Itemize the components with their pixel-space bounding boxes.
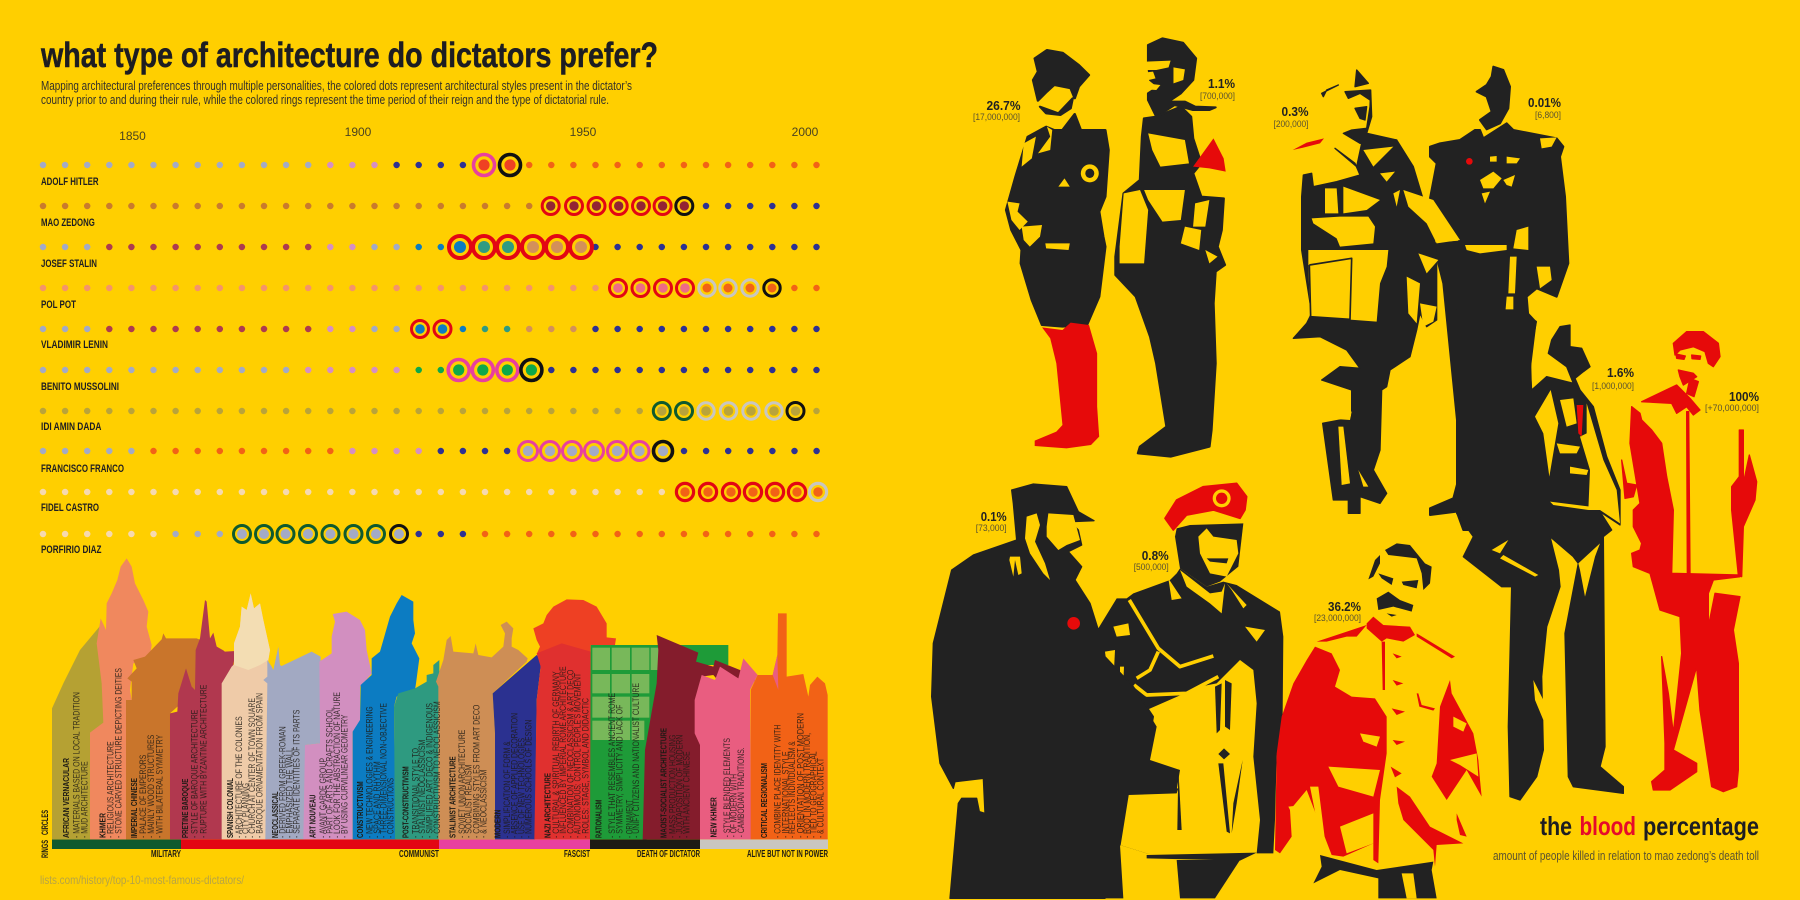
armband <box>1193 138 1226 172</box>
building: spanish colonial upper tower <box>234 593 270 670</box>
labels: second half of styles: - TRANSITIONAL STYLE TO <box>410 748 420 838</box>
dot row: porfirio diaz: PORFIRIO DIAZ <box>41 544 102 556</box>
dot row: francisco franco: FRANCISCO FRANCO <box>41 463 124 475</box>
legend labels: RINGS <box>40 840 51 858</box>
legend labels: ALIVE BUT NOT IN POWER <box>747 849 828 860</box>
dot row: josef stalin: JOSEF STALIN <box>41 258 97 270</box>
labels: first half of styles: - AVANT GARDE GROUP <box>318 758 328 838</box>
labels: new khmer and critical regionalism: CRITICAL REGIONALISM <box>759 763 769 838</box>
labels: second half of styles: - ROLES: STAGE, SYMBOL AND DIDACTIC <box>580 698 590 838</box>
labels: second half of styles: - USE OF NEW TECHNOLOGIES <box>516 738 526 838</box>
death toll labels: [73,000] <box>976 523 1007 534</box>
blood percentage labels: 1.6% <box>1607 365 1634 380</box>
figure: franco <box>1293 70 1460 513</box>
labels: first half of styles: - STYLE OF BAROQUE ARCHITECTURE <box>189 710 199 838</box>
building: nazi <box>534 643 591 839</box>
building: spanish colonial <box>222 593 270 839</box>
dot row: pol pot <box>41 280 817 311</box>
death toll labels: [23,000,000] <box>1314 613 1361 624</box>
labels: new khmer and critical regionalism: - STYLE BLENDED ELEMENTS <box>722 738 732 837</box>
red streak <box>1293 138 1324 150</box>
heading: the blood percentage: blood <box>1580 811 1636 841</box>
labels: first half of styles <box>61 668 395 838</box>
red dot <box>1067 617 1080 630</box>
death toll labels: [1,000,000] <box>1592 381 1634 392</box>
intro text: Mapping architectural preferences through multiple personalities, the colored dots represent architectural styles present in the dictator’s <box>41 79 632 93</box>
labels: first half of styles: - MUD ARCHITECTURE <box>80 761 90 838</box>
building: nazi dome <box>533 599 616 660</box>
figure: fidel castro <box>932 484 1153 898</box>
dot row: vladimir lenin <box>41 320 817 351</box>
figure: mussolini <box>1116 38 1226 457</box>
blood percentage labels: 100% <box>1729 389 1759 404</box>
labels: new khmer and critical regionalism <box>708 713 825 838</box>
blood percentage labels <box>981 76 1759 614</box>
labels: second half of styles: STALINIST ARCHITECTURE <box>448 756 458 838</box>
legend labels: FASCIST <box>564 849 590 860</box>
building: khmer <box>90 558 152 839</box>
labels: first half of styles: - MATERIALS BASED ON LOCAL TRADITION <box>71 692 81 838</box>
blood percentage labels: 26.7% <box>986 98 1021 113</box>
labels: first half of styles: - STONE CARVED STRUCTURE DEPICTING DEITIES <box>114 668 124 838</box>
legend labels: DEATH OF DICTATOR <box>637 849 700 860</box>
building: art nouveau <box>303 612 372 839</box>
labels: second half of styles: - COMBINATION OF NEOCLASSICISM & ART DECO <box>565 670 575 838</box>
heading: the blood percentage: the <box>1540 811 1572 841</box>
labels: first half of styles: - SPACE AND RHYTHM <box>372 761 382 838</box>
heading: the blood percentage: percentage <box>1643 811 1759 841</box>
critical regionalism pink accent <box>773 655 778 690</box>
timeline year labels: 2000 <box>792 125 819 139</box>
labels: new khmer and critical regionalism: - REFLECTS INDIVIDUALISM & <box>787 741 797 838</box>
labels: second half of styles: - ORNAMENT <box>624 799 634 838</box>
timeline year labels <box>119 125 819 143</box>
labels: first half of styles: CONSTRUCTIVISM <box>355 781 365 838</box>
labels: new khmer and critical regionalism: - INTERNATIONAL STYLE <box>780 751 790 838</box>
labels: first half of styles: PRETINE BAROQUE <box>180 779 190 838</box>
dot row: mao zedong <box>41 198 817 229</box>
rationalism window grid <box>592 648 659 740</box>
labels: second half of styles: - INFLUENCED BY IMPERIAL ROME ARCHITECTURE <box>558 666 568 838</box>
building: modern <box>493 655 543 839</box>
labels: second half of styles: NAZI ARCHITECTURE <box>543 773 553 838</box>
intro text: country prior to and during their rule, while the colored rings represent the time period of their reign and the type of dictatorial rule. <box>41 93 609 107</box>
source link text: lists.com/history/top-10-most-famous-dictators/ <box>40 873 245 887</box>
dot row: adolf hitler <box>41 154 817 188</box>
labels: first half of styles: SPANISH COLONIAL <box>225 778 235 838</box>
labels: second half of styles: - CULTURAL & SPIRITUAL REBIRTH OF GERMANY <box>551 671 561 838</box>
labels: first half of styles: - SEPARATE IDENTITIES OF ITS PARTS <box>291 710 301 838</box>
skyline second half <box>394 599 755 839</box>
death toll labels: [700,000] <box>1200 91 1235 102</box>
labels: second half of styles: - MASS PRODUCTION HOUSING <box>668 735 678 838</box>
figure: stalin <box>1275 543 1482 898</box>
dot row: idi amin dada <box>41 402 817 433</box>
dot row: vladimir lenin: VLADIMIR LENIN <box>41 339 108 351</box>
dot row: porfirio diaz <box>41 526 817 556</box>
boots <box>1035 323 1099 448</box>
labels: new khmer and critical regionalism: - ROOT IN MODERN TRADITION, <box>802 733 812 838</box>
labels: new khmer and critical regionalism: - & CULTURAL CONTEXT <box>815 758 825 838</box>
building: neoclassical <box>263 647 321 839</box>
labels: first half of styles: - DERIVED FROM GREEK-ROMAN <box>278 726 288 838</box>
building: rationalism <box>590 645 728 839</box>
labels: second half of styles: - CONSTRUCTIVISM TO NEOCLASSICISM <box>432 701 442 838</box>
labels: first half of styles: - PALACE OF EMPERORS <box>138 755 148 838</box>
death toll labels: [17,000,000] <box>973 112 1020 123</box>
labels: first half of styles: - ARCHITECTURE OF THE COLONIES <box>234 716 244 838</box>
figure: lenin <box>1457 310 1623 800</box>
intro text <box>41 79 632 107</box>
labels: second half of styles: - ABSENCE OF APPLIED DECORATION <box>509 713 519 838</box>
dot row: idi amin dada: IDI AMIN DADA <box>41 421 101 433</box>
labels: first half of styles: - CONSTRUCTIONS <box>385 778 395 838</box>
timeline year labels: 1850 <box>119 129 146 143</box>
death toll labels <box>973 91 1759 624</box>
building: constructivism <box>353 595 419 839</box>
building: african vernacular <box>52 626 105 839</box>
labels: new khmer and critical regionalism: - CAMBODIAN TRADITIONS. <box>736 747 746 837</box>
labels: second half of styles: - JUXTAPOSITION OF MODERN <box>674 735 684 838</box>
legend band: rule types <box>52 840 828 849</box>
legend labels: CIRCLES <box>40 810 51 835</box>
labels: first half of styles: - RUPTURE WITH BYZANTINE ARCHITECTURE <box>199 685 209 838</box>
labels: second half of styles: - UNIFY CITIZENS AND NATIONALIST CULTURE <box>631 683 641 838</box>
legend labels: MILITARY <box>151 849 181 860</box>
death toll labels: [200,000] <box>1274 119 1308 130</box>
labels: new khmer and critical regionalism: - TIED TO GEOGRAPHICAL <box>809 751 819 838</box>
building: pretine baroque <box>170 600 236 839</box>
labels: first half of styles: - BY USING CURVILINEAR GEOMETRY <box>339 715 349 838</box>
red cap <box>1165 483 1247 530</box>
labels: first half of styles: - WITH BILATERAL SYMMETRY <box>155 735 165 838</box>
labels: second half of styles <box>400 666 691 838</box>
labels: new khmer and critical regionalism: - ORIENTATION OF POST MODERN <box>795 713 805 838</box>
labels: second half of styles: - SIMPLIFICATION OF FORM & <box>502 741 512 838</box>
labels: first half of styles: - PART OF ARTS AND CRAFTS SCHOOL <box>324 708 334 838</box>
dot row: pol pot: POL POT <box>41 299 76 311</box>
labels: first half of styles: - LOOK FOR THE ABSTRACTION OF NATURE <box>332 692 342 838</box>
heading: the blood percentage <box>1540 811 1759 841</box>
figure: hitler <box>1006 50 1109 448</box>
figure: idi amin <box>1087 483 1283 898</box>
building: post-constructivism <box>394 660 439 839</box>
labels: second half of styles: - AUTONOMOUS: CONTROL PEOPLE’S MOVEMENT <box>573 673 583 838</box>
labels: second half of styles: - NUMEROUS SCHOOLS OF DESIGN <box>524 720 534 838</box>
blood percentage labels: 1.1% <box>1208 76 1235 91</box>
title: what type of architecture do dictators prefer? <box>40 36 658 75</box>
labels: second half of styles: - & NEOCLASSICISM <box>479 770 489 838</box>
labels: first half of styles: - CITY PLANNING <box>241 783 251 838</box>
death toll labels: [500,000] <box>1134 562 1169 573</box>
dot row: adolf hitler: ADOLF HITLER <box>41 176 99 188</box>
labels: second half of styles: POST-CONSTRUCTIVISM <box>400 766 410 838</box>
labels: second half of styles: MODERN <box>492 810 502 838</box>
labels: second half of styles: - SOCIALIST REALISM <box>464 765 474 838</box>
labels: first half of styles: ART NOUVEAU <box>308 795 318 838</box>
death toll labels: [+70,000,000] <box>1705 403 1759 414</box>
labels: second half of styles: - SYMMETRY, SIMPLICITY AND LACK OF <box>614 704 624 838</box>
labels: second half of styles: - STYLE THAT RESEMBLES ANCIENT ROME <box>607 693 617 838</box>
labels: second half of styles: - COMBINING STYLES FROM ART DECO <box>471 705 481 838</box>
dot row: josef stalin <box>41 236 817 270</box>
labels: first half of styles: - BAROQUE ORNAMENTATION FROM SPAIN <box>255 693 265 838</box>
labels: first half of styles: - MAINLY WOOD STRUCTURES <box>146 735 156 838</box>
labels: first half of styles: AFRICAN VERNACULAR <box>61 757 71 838</box>
labels: first half of styles: - CHURCH AT CENTER OF TOWN SQUARE <box>247 698 257 838</box>
labels: first half of styles: NEOCLASSICAL <box>270 791 280 838</box>
timeline year labels: 1900 <box>345 125 372 139</box>
building: critical regionalism <box>751 613 828 839</box>
labels: new khmer and critical regionalism: - OF MODERN WITH <box>729 774 739 837</box>
labels: first half of styles: KHMER <box>98 812 108 838</box>
building: new khmer <box>695 658 758 839</box>
legend labels <box>40 810 828 860</box>
blood percentage labels: 0.1% <box>981 509 1007 524</box>
dot row: francisco franco <box>41 442 817 475</box>
blood percentage labels: 0.8% <box>1142 548 1169 563</box>
dot row: fidel castro: FIDEL CASTRO <box>41 502 99 514</box>
building: imperial chinese <box>126 633 224 839</box>
blood percentage labels: 36.2% <box>1328 599 1361 614</box>
labels: second half of styles: - SIMPLIFIED ART DECO & INDIGENOUS <box>425 703 435 838</box>
labels: second half of styles: - SOVIET UNION ARCHITECTURE <box>457 730 467 838</box>
death toll labels: [6,800] <box>1535 110 1561 121</box>
labels: second half of styles: MAOIST-SOCIALIST ARCHITECTURE <box>658 728 668 838</box>
blood percentage labels: 0.01% <box>1528 95 1561 110</box>
figure: mao zedong <box>1622 332 1757 792</box>
labels: second half of styles: RATIONALISM <box>593 800 603 838</box>
labels: new khmer and critical regionalism: NEW KHMER <box>708 797 718 837</box>
dot row: mao zedong: MAO ZEDONG <box>41 217 95 229</box>
building: stalinist <box>436 622 528 839</box>
labels: second half of styles: - WITH ANCIENT CHINESE <box>681 751 691 838</box>
dot row: benito mussolini <box>41 360 817 393</box>
labels: second half of styles: - STALINIST NEOCLASSICISM <box>417 740 427 838</box>
building: maoist-socialist <box>643 635 755 839</box>
labels: first half of styles: IMPERIAL CHINESE <box>129 778 139 838</box>
figure: diaz <box>1430 67 1580 530</box>
skyline right end <box>695 613 828 839</box>
labels: first half of styles: - EMPHASIZED THE WALL <box>285 748 295 838</box>
dot row: fidel castro <box>41 483 827 514</box>
labels: first half of styles: - NEW TECHNOLOGIES & ENGINEERING <box>364 706 374 838</box>
labels: first half of styles: - RELIGIOUS ARCHITECTURE <box>105 741 115 838</box>
labels: new khmer and critical regionalism: - COMBINE PLACE IDENTITY WITH <box>773 725 783 838</box>
legend labels: COMMUNIST <box>399 849 439 860</box>
timeline year labels: 1950 <box>570 125 597 139</box>
dot row: benito mussolini: BENITO MUSSOLINI <box>41 381 119 393</box>
skyline of architectural styles <box>52 558 419 839</box>
blood percentage labels: 0.3% <box>1282 104 1309 119</box>
labels: first half of styles: - THREE-DIMENSIONAL NON-OBJECTIVE <box>379 703 389 838</box>
